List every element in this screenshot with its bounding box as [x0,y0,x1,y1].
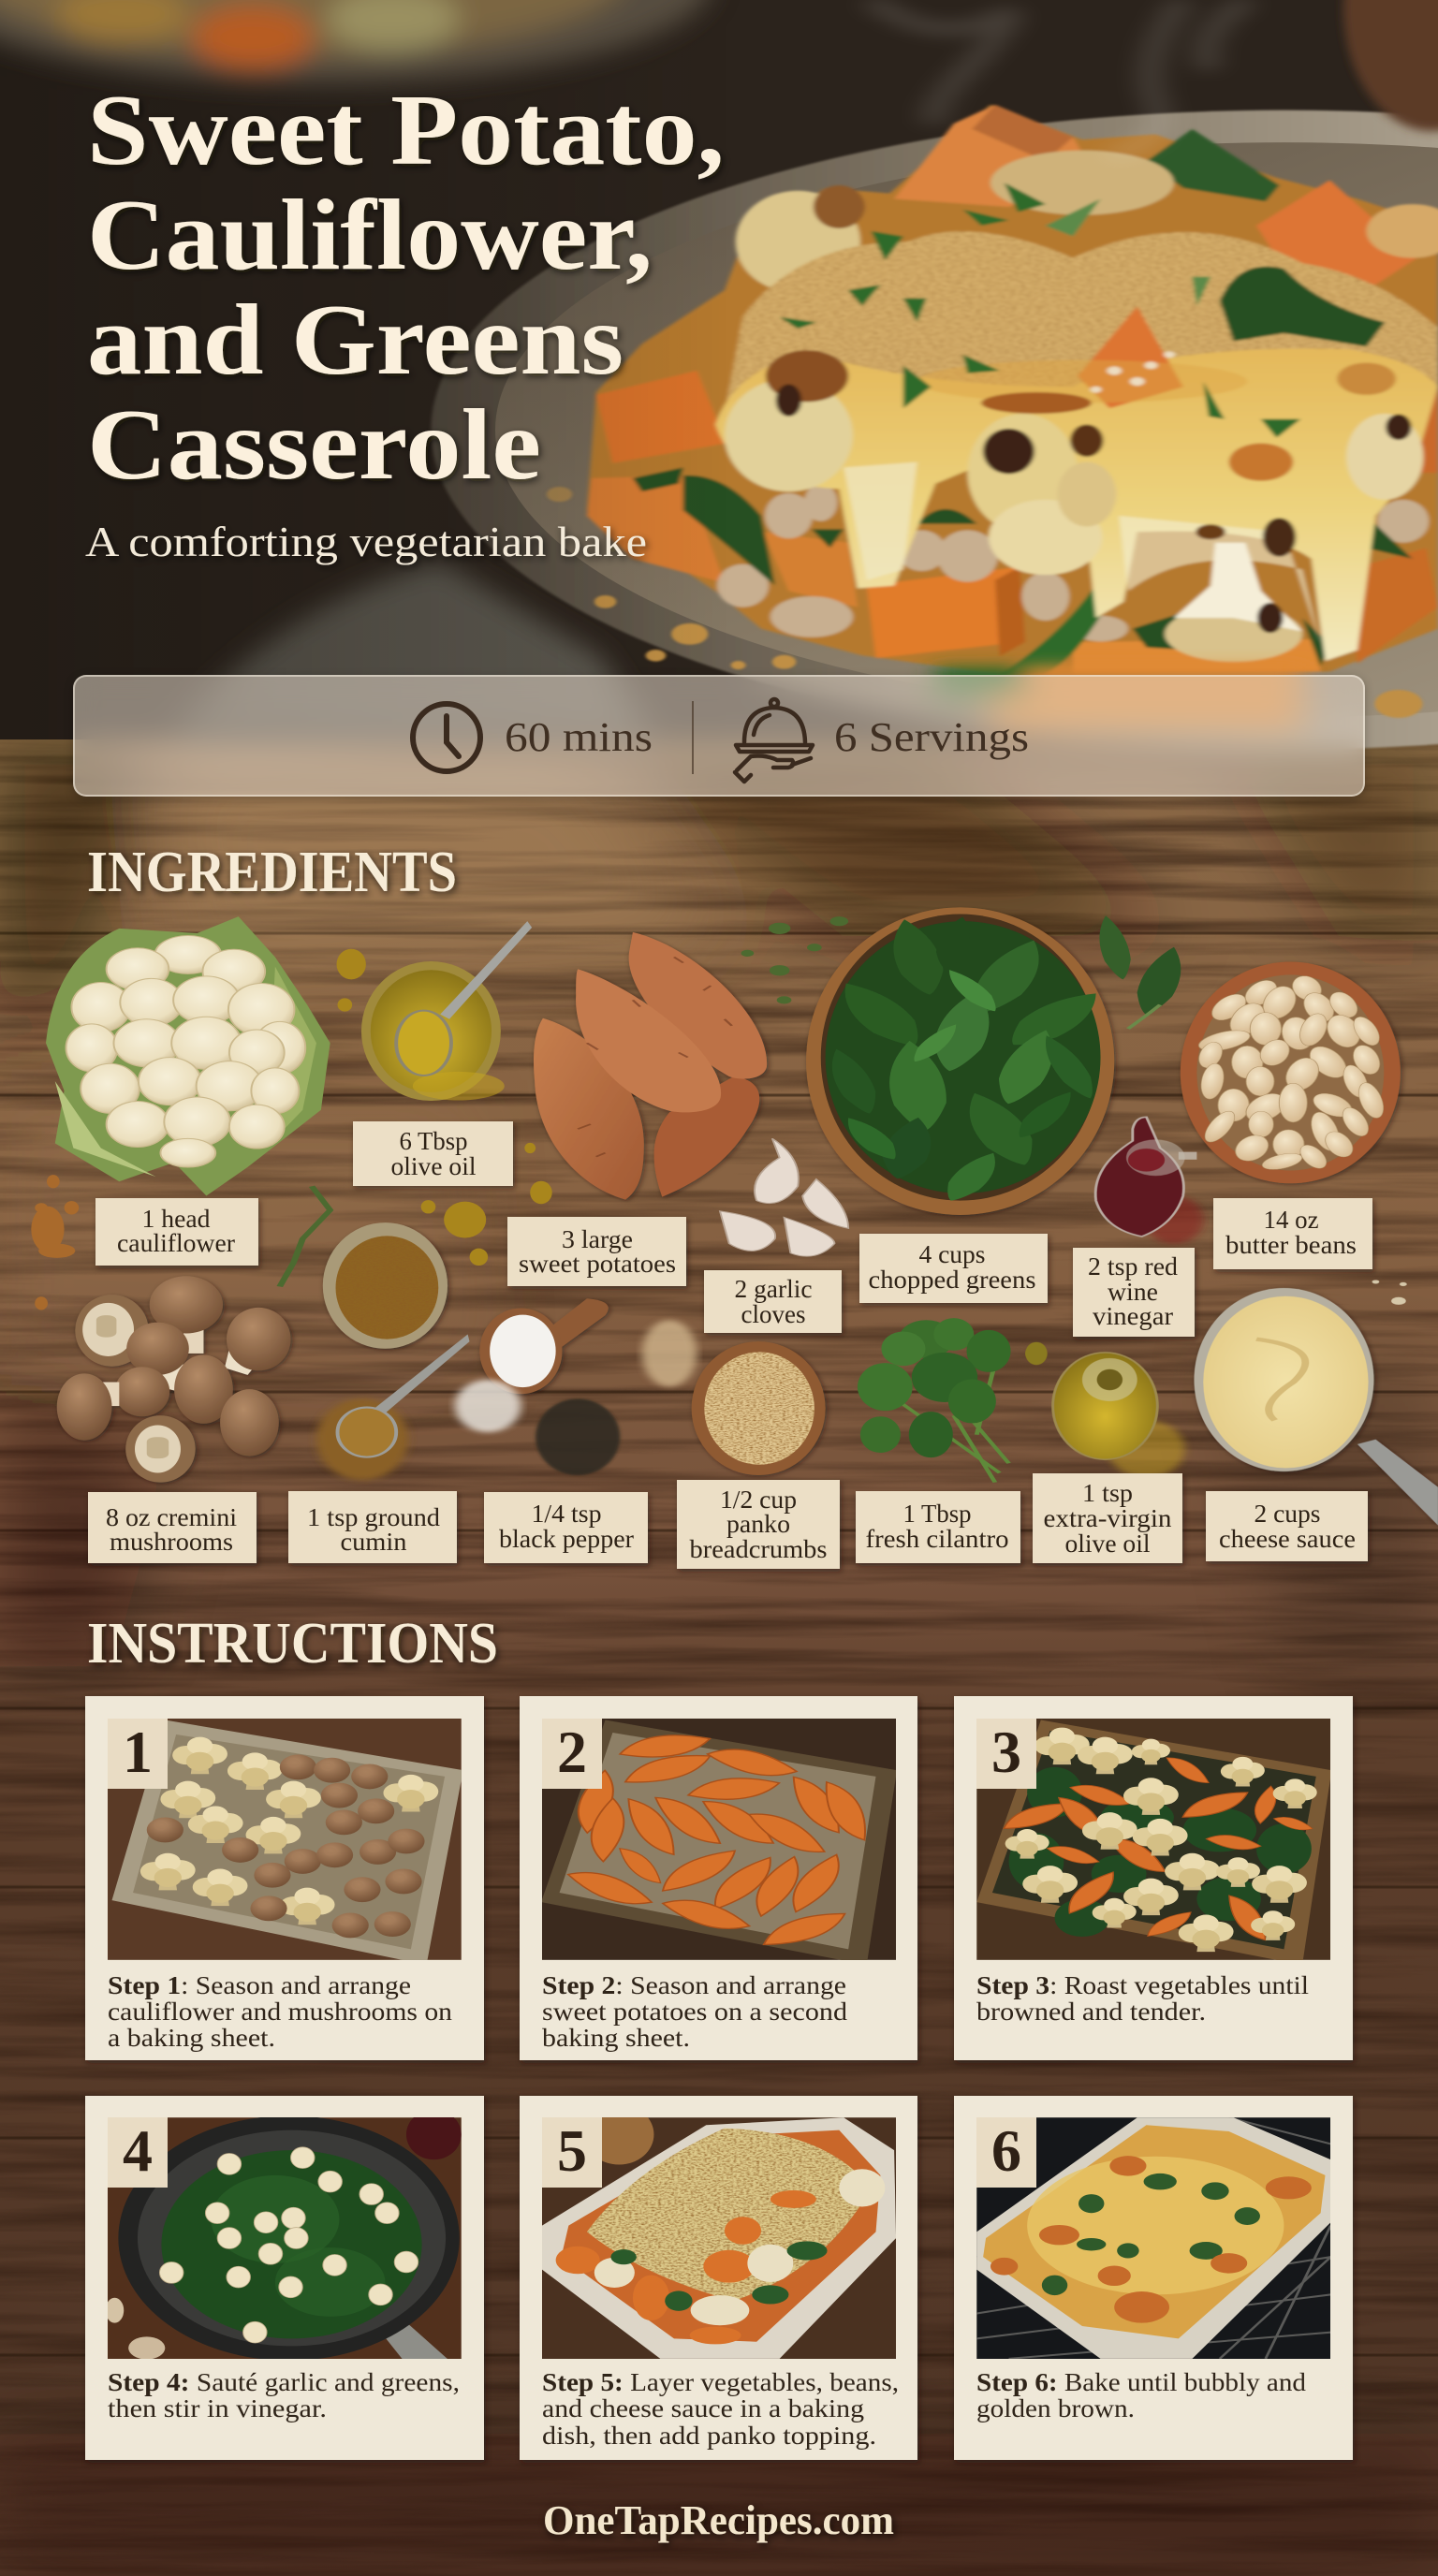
photo: roasted vegetables [976,1719,1331,1965]
step 5 text: Step 5: Layer vegetables, beans, [542,2368,899,2396]
photo: baked casserole in oven [976,2117,1330,2360]
title: Cauliflower, [87,180,653,291]
icon: clock [413,704,480,771]
footer website: OneTapRecipes.com [543,2497,894,2543]
photo: cauliflower and mushrooms on sheet [108,1719,463,1965]
step 3 text [976,1971,1309,2026]
dark hero backdrop [0,0,1438,739]
step 6 text: golden brown. [976,2394,1135,2422]
label: mushrooms: 8 oz cremini [106,1503,237,1531]
title: Casserole [87,389,541,501]
label: greens: 4 cups [919,1240,985,1268]
label: cheese sauce: 2 cups [1255,1500,1320,1528]
step number 6 [976,2117,1036,2188]
spilled herbs [280,916,848,1286]
step number 2 [542,1719,602,1789]
olive oil bowl [361,921,532,1101]
servings: 6 Servings [834,714,1029,760]
salt scoop [479,1298,609,1394]
glass info bar [73,675,1365,797]
casserole [587,105,1438,674]
plate [431,110,1438,750]
label: black pepper: black pepper [499,1525,634,1553]
label: cauliflower: 1 head [142,1205,211,1233]
label: mushrooms: mushrooms [110,1528,233,1556]
step number 6: 6 [991,2117,1021,2184]
scattered crumbs right [1372,1280,1407,1305]
label: sweet potatoes: 3 large [562,1225,633,1253]
dark overlay behind title [0,0,730,739]
step 4 text: then stir in vinegar. [108,2394,327,2422]
card: step 2 [520,1696,917,2060]
label: panko: breadcrumbs [689,1535,828,1563]
bottom sweet potato cubes [596,371,726,463]
panko bowl [692,1341,826,1475]
label: olive oil: olive oil [391,1152,476,1180]
label: butter beans: butter beans [1225,1231,1357,1259]
step 5 text: and cheese sauce in a baking [542,2394,864,2422]
title: and Greens [87,285,624,396]
label: olive oil: 6 Tbsp [399,1127,468,1155]
spinach pieces [633,267,1413,674]
label: black pepper [484,1492,648,1563]
label: cauliflower [95,1198,258,1266]
label: panko [677,1480,840,1569]
title [87,75,725,501]
label: vinegar: 2 tsp red [1088,1252,1179,1281]
label: butter beans: 14 oz [1264,1206,1319,1234]
label: garlic [704,1270,842,1333]
sweet potatoes [534,932,767,1200]
salt pile [455,1380,521,1432]
ingredient illustrations [31,907,1438,1526]
cheese sauce saucepan [1194,1288,1438,1526]
napkin [169,562,655,739]
step 6 text [976,2368,1307,2422]
blurred terracotta bowl [1343,0,1438,131]
label: garlic: cloves [741,1300,805,1328]
prep time: 60 mins [505,714,653,760]
red wine vinegar cruet [1095,1117,1203,1244]
top sweet potato chunks [736,105,1438,293]
title: Sweet Potato, [87,75,725,186]
label: garlic: 2 garlic [734,1275,813,1303]
label: cumin: 1 tsp ground [307,1503,441,1531]
photo: layered casserole dish [542,2104,896,2360]
cumin bowl [323,1222,448,1349]
oil drips [337,949,552,1266]
step 5 text: dish, then add panko topping. [542,2422,876,2450]
step 1 text: cauliflower and mushrooms on [108,1998,453,2026]
mushrooms [57,1276,291,1483]
label: greens [859,1234,1048,1303]
step 2 text: baking sheet. [542,2024,690,2052]
label: cilantro [856,1491,1020,1563]
step 2 text: sweet potatoes on a second [542,1998,848,2026]
photo: garlic and greens in skillet [106,2109,462,2361]
label: cumin: cumin [341,1528,407,1556]
label: extra-virgin olive oil: 1 tsp [1082,1479,1133,1507]
fresh cilantro [858,1318,1011,1483]
step 1 text: a baking sheet. [108,2024,275,2052]
step 4 text [108,2368,460,2422]
card: step 1 [85,1696,484,2060]
left spilled crumbs [31,1175,79,1310]
card: step 4 [85,2096,484,2460]
spinach leaves [1092,915,1193,1029]
card: step 3 [954,1696,1353,2060]
step 3 text: browned and tender. [976,1998,1206,2026]
label: olive oil [353,1121,513,1186]
casserole glow behind bar [935,666,1302,731]
label: sweet potatoes: sweet potatoes [519,1250,676,1278]
step 3 text: Step 3 : Roast vegetables until [976,1971,1309,1999]
label: vinegar: vinegar [1093,1302,1173,1330]
step 1 text: Step 1 : Season and arrange [108,1971,411,1999]
label: sweet potatoes [507,1217,686,1286]
section heading: ingredients: INGREDIENTS [87,841,457,904]
black pepper pile [536,1398,620,1475]
card: step 5 [520,2096,917,2460]
step 1 text [108,1971,453,2052]
blurred background bowl [0,0,712,82]
label: cheese sauce: cheese sauce [1219,1525,1356,1553]
label: mushrooms [88,1492,257,1563]
step number 5: 5 [557,2117,587,2184]
breadcrumb pile [642,1320,697,1387]
label: panko: 1/2 cup [720,1486,797,1514]
step number 1: 1 [123,1719,153,1785]
card: step 6 [954,2096,1353,2460]
label: butter beans [1213,1198,1372,1269]
hero photo of the casserole [0,0,1438,750]
label: extra-virgin olive oil: extra-virgin [1043,1504,1172,1532]
label: cilantro: 1 Tbsp [902,1500,972,1528]
step 6 text: Step 6: Bake until bubbly and [976,2368,1307,2396]
label: black pepper: 1/4 tsp [532,1500,601,1528]
step 2 text [542,1971,848,2052]
subtitle: A comforting vegetarian bake [85,519,647,565]
label: vinegar: wine [1108,1278,1158,1306]
ground cumin spoon [316,1335,470,1480]
label: cauliflower: cauliflower [117,1229,235,1257]
step 4 text: Step 4: Sauté garlic and greens, [108,2368,460,2396]
label: panko: panko [726,1510,790,1538]
roasted cauliflower florets [725,350,1423,662]
crumb topping [725,231,1438,414]
step number 1 [108,1719,168,1789]
beans [717,484,1429,641]
spilled crumbs on plate [547,487,1422,718]
butter beans bowl [1181,962,1401,1183]
step number 3: 3 [991,1719,1021,1785]
step number 2: 2 [557,1719,587,1785]
steam [872,0,1247,155]
icon: serving cloche [735,699,813,782]
label: extra-virgin olive oil [1033,1473,1182,1563]
step 2 text: Step 2 : Season and arrange [542,1971,846,1999]
melted cheese [715,348,1438,661]
label: extra-virgin olive oil: olive oil [1065,1530,1150,1558]
wooden table background [0,730,1438,2576]
photo: sweet potato wedges on sheet [541,1719,897,1965]
label: cumin [288,1491,457,1563]
olive oil cruet [1025,1342,1185,1478]
ingredient labels [88,1121,1372,1569]
step number 3 [976,1719,1036,1789]
section heading: instructions: INSTRUCTIONS [87,1612,498,1676]
cauliflower [46,916,330,1196]
step number 4: 4 [123,2117,153,2184]
divider [692,701,694,774]
label: cheese sauce [1206,1491,1368,1561]
step number 5 [542,2117,602,2188]
label: greens: chopped greens [869,1266,1035,1294]
garlic cloves [720,1138,848,1256]
step 5 text [542,2368,899,2450]
instruction cards [85,1696,1353,2460]
label: cilantro: fresh cilantro [865,1525,1009,1553]
label: vinegar [1073,1248,1195,1337]
greens bowl [806,907,1115,1215]
step number 4 [108,2117,168,2188]
herb flecks [780,183,1300,438]
